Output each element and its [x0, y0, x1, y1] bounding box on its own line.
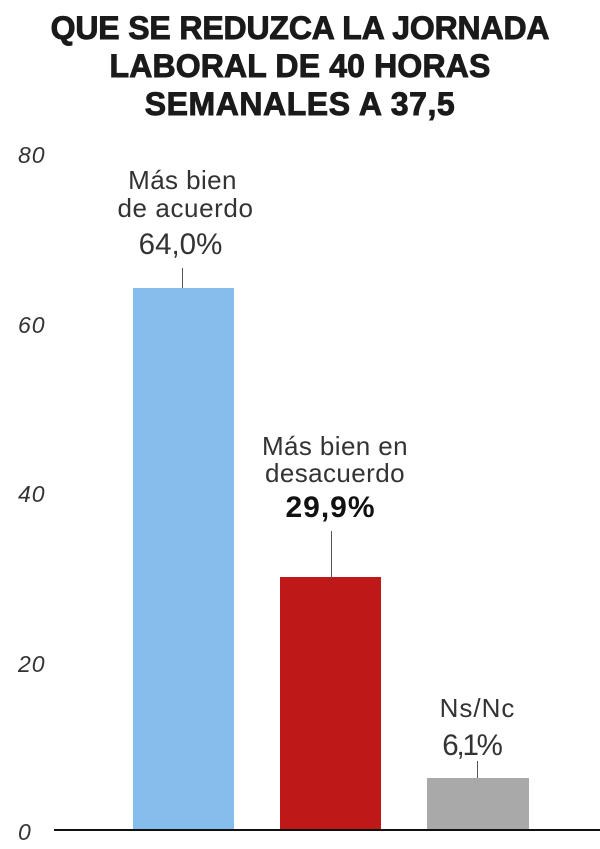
- title: LABORAL DE 40 HORAS: [110, 48, 490, 84]
- bar: Ns/Nc: [427, 778, 529, 829]
- title: [51, 10, 550, 122]
- x axis: [54, 829, 600, 831]
- y axis labels: 0: [18, 819, 32, 845]
- label: Más bien en desacuerdo: Más bien en: [262, 431, 408, 461]
- label: Más bien de acuerdo: de acuerdo: [117, 192, 254, 222]
- y axis labels: 40: [18, 481, 46, 507]
- label: Más bien de acuerdo: [117, 165, 254, 288]
- y axis labels: [18, 142, 46, 845]
- title: SEMANALES A 37,5: [145, 86, 455, 122]
- y axis labels: 20: [18, 651, 46, 677]
- bar: Más bien de acuerdo: [133, 288, 234, 829]
- bar: Más bien en desacuerdo: [280, 577, 381, 829]
- label: Más bien de acuerdo: Más bien: [128, 165, 237, 195]
- label: Más bien en desacuerdo: [262, 431, 408, 579]
- y axis labels: 80: [18, 142, 46, 168]
- label: Más bien de acuerdo: 64,0%: [139, 228, 222, 261]
- y axis labels: 60: [18, 312, 46, 338]
- label: Ns/Nc: [440, 693, 515, 778]
- title: QUE SE REDUZCA LA JORNADA: [51, 10, 549, 46]
- label: Ns/Nc: 6,1%: [442, 729, 501, 762]
- label: Ns/Nc: Ns/Nc: [440, 693, 515, 723]
- label: Más bien en desacuerdo: 29,9%: [285, 491, 376, 524]
- label: Más bien en desacuerdo: desacuerdo: [265, 458, 405, 488]
